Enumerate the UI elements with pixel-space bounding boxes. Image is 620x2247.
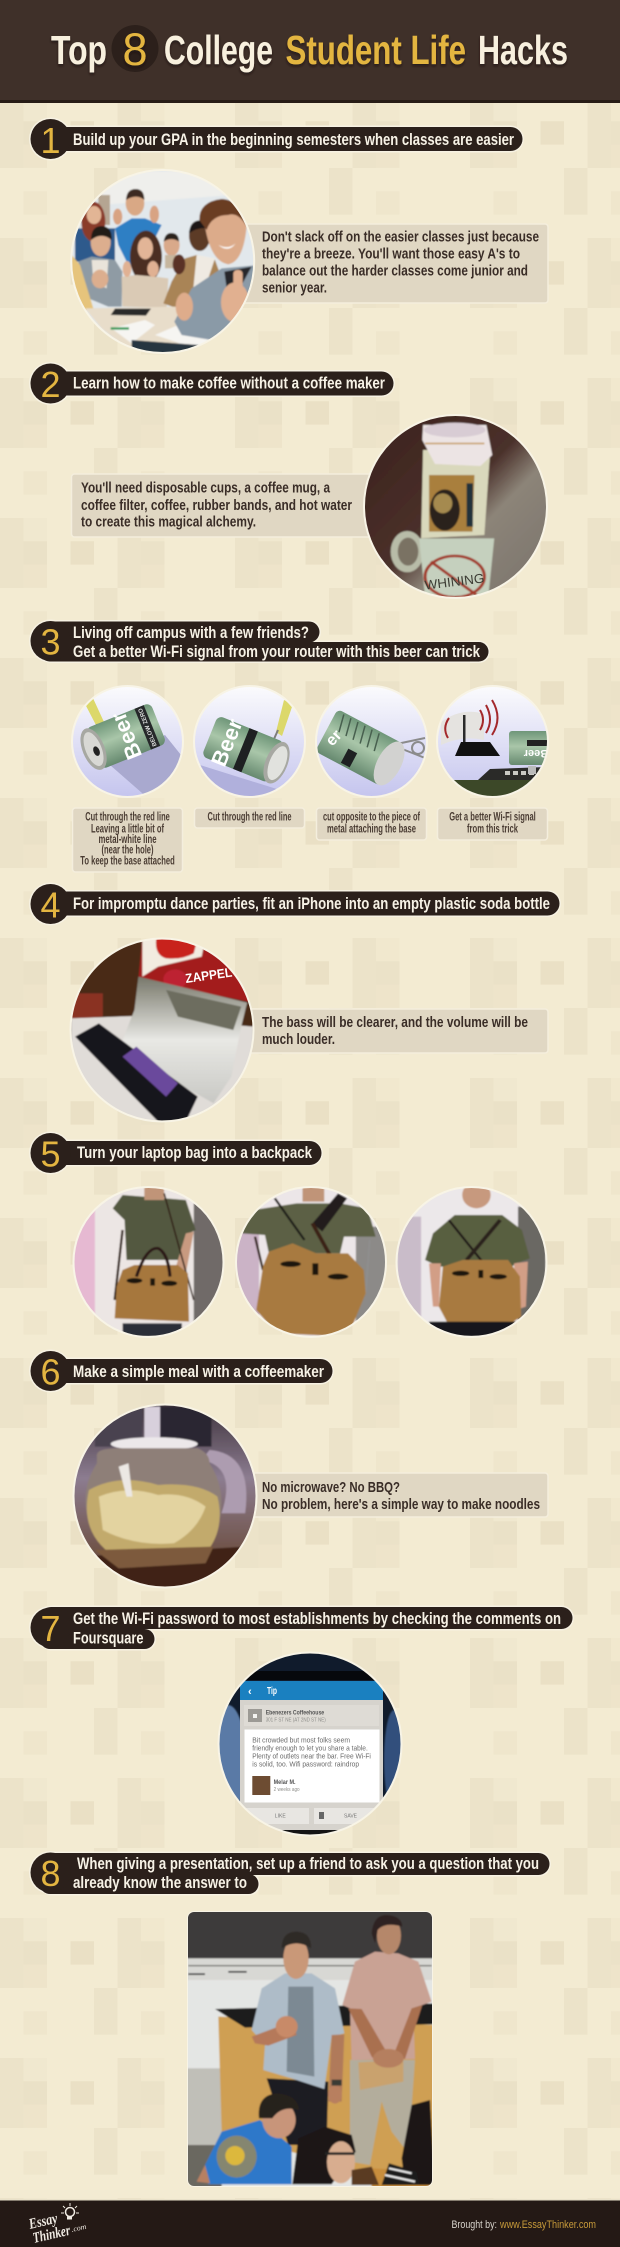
text box 1: Don't slack off on the easier classes just because bbox=[262, 229, 539, 246]
scissors bbox=[400, 737, 426, 758]
teacher in blue bbox=[113, 189, 162, 268]
reflector bbox=[441, 712, 484, 745]
photo 1 ring bbox=[71, 170, 254, 353]
text box 1: senior year. bbox=[262, 279, 327, 296]
photo 5c: worn as backpack bbox=[395, 1182, 550, 1338]
text box 2: to create this magical alchemy. bbox=[81, 514, 256, 531]
woman center bbox=[122, 231, 168, 308]
caption 2: Cut through the red line bbox=[208, 812, 292, 824]
app bar bbox=[240, 1681, 383, 1701]
photo 5c ring bbox=[396, 1187, 546, 1337]
text box 1: balance out the harder classes come junior and bbox=[262, 262, 528, 279]
can illustration 3: er bbox=[323, 727, 346, 750]
can illustration 3 bbox=[315, 686, 426, 796]
heading 3 bbox=[29, 620, 490, 663]
can ring 1 bbox=[72, 686, 183, 797]
heading 3: Living off campus with a few friends? bbox=[73, 623, 309, 642]
tip card: Plenty of outlets near the bar. Free Wi-Fi bbox=[252, 1753, 371, 1760]
knife bbox=[86, 699, 104, 724]
earth wallpaper bbox=[220, 1704, 400, 1802]
router ring bbox=[437, 686, 548, 797]
photo 8: classroom presentation bbox=[185, 1905, 435, 2190]
photo 7: Foursquare phone screenshot: ‹ bbox=[248, 1686, 252, 1698]
router illustration: Beer bbox=[523, 747, 548, 759]
heading 2: Learn how to make coffee without a coffee maker bbox=[73, 374, 385, 393]
credit bbox=[452, 2219, 596, 2231]
footer bar bbox=[0, 2199, 620, 2247]
blond hair bbox=[72, 255, 93, 312]
title: Hacks bbox=[478, 27, 568, 73]
heading 6 bbox=[29, 1350, 334, 1392]
caption 1: To keep the base attached bbox=[80, 855, 175, 867]
heading 6: 6 bbox=[40, 1352, 61, 1392]
bag lettering: ZAPPEL bbox=[184, 965, 233, 986]
credit: Brought by: bbox=[452, 2219, 497, 2231]
status bar bbox=[246, 1671, 374, 1680]
photo 5a ring bbox=[74, 1187, 224, 1337]
heading 7: Foursquare bbox=[73, 1628, 144, 1647]
text box 1 bbox=[240, 224, 548, 303]
can illustration 1: BELOW ZERO bbox=[138, 707, 159, 747]
photo 7 ring bbox=[218, 1652, 402, 1836]
student with glasses bbox=[292, 2127, 356, 2184]
heading 7: 7 bbox=[40, 1608, 61, 1649]
knife bbox=[274, 700, 292, 738]
photo 5b ring bbox=[236, 1187, 386, 1337]
photo 4: iPhone in soda bottle bbox=[72, 940, 252, 1120]
heading 5 bbox=[29, 1132, 323, 1174]
photo 6: noodles in coffee pot bbox=[74, 1406, 256, 1586]
photo 2: coffee mug bbox=[365, 416, 546, 597]
man on left bbox=[78, 226, 122, 307]
can illustration 1 bbox=[72, 686, 185, 800]
table and tablet bbox=[85, 306, 208, 352]
heading 1 bbox=[29, 118, 524, 161]
presenter bbox=[252, 1932, 344, 2145]
photo 2 ring bbox=[364, 415, 547, 598]
heading 4: 4 bbox=[40, 884, 61, 926]
title: 8 bbox=[122, 24, 148, 75]
text box 2: coffee filter, coffee, rubber bands, and hot water bbox=[81, 497, 352, 514]
venue row bbox=[248, 1709, 326, 1722]
caption 1: metal-white line bbox=[98, 834, 156, 846]
text box 6 bbox=[240, 1473, 548, 1517]
text box 4: much louder. bbox=[262, 1031, 335, 1048]
can illustration 1: Beer bbox=[105, 708, 147, 763]
text box 2 bbox=[72, 474, 372, 537]
heading 8 bbox=[29, 1851, 551, 1896]
text box 4 bbox=[240, 1009, 548, 1053]
caption 2 bbox=[194, 808, 304, 828]
caption 4: from this trick bbox=[467, 823, 518, 835]
number 8 circle bbox=[112, 25, 158, 72]
can antenna bbox=[509, 731, 551, 765]
credit: www.EssayThinker.com bbox=[499, 2219, 596, 2231]
heading 2 bbox=[29, 362, 395, 405]
can ring 3 bbox=[316, 686, 427, 797]
heading 8: already know the answer to bbox=[73, 1873, 247, 1892]
photo 5a: bag carried by hand bbox=[71, 1185, 225, 1338]
title: Top bbox=[51, 27, 107, 73]
tip card: Bit crowded but most folks seem bbox=[252, 1737, 350, 1744]
student with dark hair bbox=[382, 2100, 435, 2185]
action buttons: LIKE bbox=[275, 1813, 286, 1819]
logo: .com bbox=[70, 2222, 88, 2234]
text box 6: No microwave? No BBQ? bbox=[262, 1479, 400, 1496]
venue row: Ebenezers Coffeehouse bbox=[266, 1711, 325, 1717]
caption 3: metal attaching the base bbox=[327, 823, 416, 835]
heading 4 bbox=[29, 882, 561, 926]
action buttons bbox=[246, 1808, 374, 1824]
logo: Essay bbox=[27, 2211, 59, 2233]
text box 1: they're a breeze. You'll want those easy A's to bbox=[262, 246, 520, 262]
heading 6: Make a simple meal with a coffeemaker bbox=[73, 1362, 324, 1381]
tip card bbox=[244, 1730, 380, 1802]
title: College bbox=[164, 27, 273, 73]
caption 4: Get a better Wi-Fi signal bbox=[449, 812, 536, 824]
text box 4: The bass will be clearer, and the volume will be bbox=[262, 1014, 528, 1031]
photo 6 ring bbox=[74, 1404, 256, 1588]
can illustration 2: Beer bbox=[206, 715, 248, 770]
bulb icon bbox=[61, 2203, 79, 2220]
caption 3: cut opposite to the piece of bbox=[323, 812, 420, 824]
text box 6: No problem, here's a simple way to make noodles bbox=[262, 1496, 540, 1513]
router illustration bbox=[438, 687, 547, 796]
heading 3: 3 bbox=[40, 622, 61, 662]
tip card: friendly enough to let you share a table. bbox=[252, 1745, 368, 1752]
caption 1: Leaving a little bit of bbox=[91, 823, 164, 835]
logo: Thinker bbox=[31, 2223, 72, 2247]
wifi arcs bbox=[445, 700, 498, 738]
caption 1: Cut through the red line bbox=[85, 812, 170, 824]
action buttons: SAVE bbox=[344, 1813, 357, 1819]
header banner bbox=[0, 0, 620, 103]
caption 1: (near the hole) bbox=[102, 845, 154, 857]
tip card: is solid, too. Wifi password: raindrop bbox=[252, 1761, 359, 1768]
front man with thumbs bbox=[174, 199, 260, 342]
screen body bbox=[240, 1700, 383, 1830]
can ring 2 bbox=[194, 686, 305, 797]
heading 5: Turn your laptop bag into a backpack bbox=[77, 1143, 312, 1162]
title: Student Life bbox=[286, 27, 466, 73]
tip card: 2 weeks ago bbox=[274, 1787, 300, 1793]
heading 7 bbox=[29, 1606, 574, 1650]
photo 1: students thumbs up bbox=[72, 171, 254, 352]
heading 2: 2 bbox=[40, 364, 61, 405]
caption 3 bbox=[316, 808, 426, 840]
caption 1 bbox=[72, 808, 182, 872]
photo 4 ring bbox=[70, 938, 254, 1122]
mug lettering: WHINING bbox=[424, 570, 485, 593]
photo 7: Foursquare phone screenshot: Tip bbox=[267, 1686, 277, 1697]
red-haired woman bbox=[75, 202, 115, 262]
man in floral shirt bbox=[342, 1915, 432, 2165]
heading 3: Get a better Wi-Fi signal from your router with this beer can trick bbox=[73, 642, 480, 661]
heading 8: 8 bbox=[40, 1853, 61, 1894]
tip card: Melar M. bbox=[274, 1780, 296, 1786]
can illustration 2 bbox=[195, 687, 304, 796]
venue row: 301 F ST NE (AT 2ND ST NE) bbox=[266, 1718, 326, 1724]
student in blue bbox=[197, 2093, 299, 2184]
man middle bbox=[164, 233, 182, 268]
man with glasses and tan jacket bbox=[163, 220, 222, 308]
photo 7: Foursquare phone screenshot bbox=[220, 1654, 400, 1834]
heading 5: 5 bbox=[40, 1134, 61, 1174]
photo 5b: straps crossed front bbox=[233, 1185, 391, 1338]
text box 2: You'll need disposable cups, a coffee mug, a bbox=[81, 480, 331, 497]
heading 1: 1 bbox=[40, 120, 61, 161]
title bbox=[51, 24, 568, 75]
logo bbox=[27, 2203, 88, 2247]
caption 4 bbox=[438, 808, 548, 840]
